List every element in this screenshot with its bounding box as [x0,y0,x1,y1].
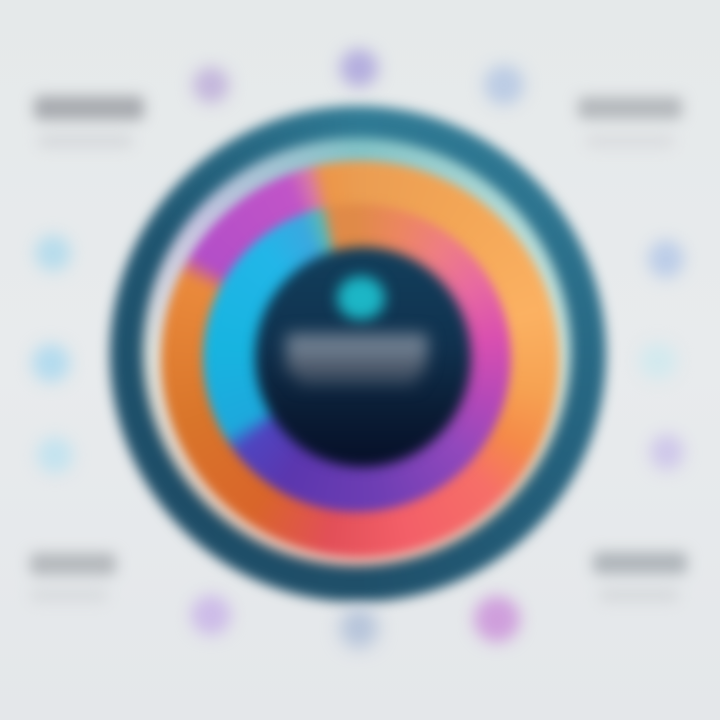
icon: top right blue [484,65,524,105]
icon: top center purple [340,49,378,87]
icon: bottom left purple [191,595,231,635]
icon: bottom center blue [340,608,378,648]
icon: left lower cyan [37,437,73,473]
label: top left heading [26,88,152,148]
label: top right heading [572,90,688,146]
icon: right upper blue [648,240,684,278]
outer segmented ring [161,161,559,557]
outer dark teal ring [110,106,606,602]
center teal dot icon [337,276,385,320]
icon: bottom right magenta [474,596,520,642]
icon: left upper cyan [35,235,71,271]
center dark circle [255,247,471,467]
inner segmented ring [203,204,511,512]
label: bottom left heading [24,546,122,600]
light inner gap ring [143,138,571,566]
icon: left middle cyan [32,344,70,382]
icon: top left purple [193,67,229,103]
label: bottom right heading [586,544,694,602]
center text block [276,323,438,392]
icon: right middle pale cyan [639,343,677,379]
icon: right lower purple [650,434,684,470]
